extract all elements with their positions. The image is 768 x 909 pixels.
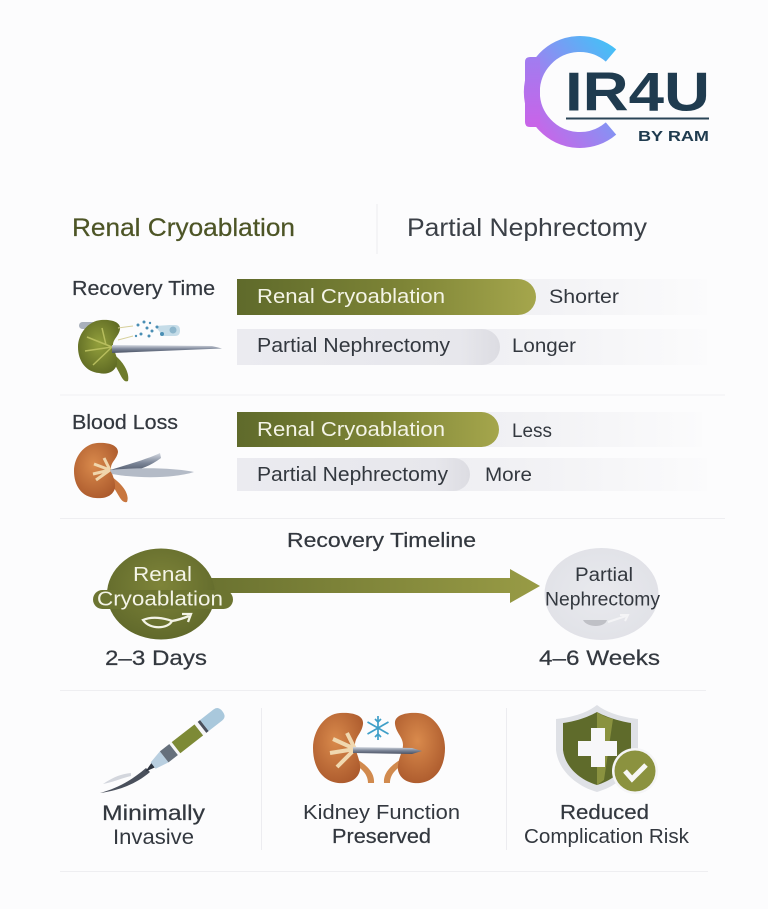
logo underline bbox=[566, 118, 709, 120]
heading: Partial Nephrectomy: Partial Nephrectomy bbox=[407, 214, 648, 242]
heading: Recovery Timeline: Recovery Timeline bbox=[287, 530, 476, 552]
logo ring bbox=[525, 44, 611, 140]
bar: Renal Cryoablation less bbox=[237, 412, 499, 447]
label: Recovery Time: Recovery Time bbox=[72, 278, 215, 300]
panel: benefits bbox=[100, 705, 690, 850]
value: 2–3 Days: 2–3 Days bbox=[105, 647, 207, 670]
icon: orange kidney with forceps bbox=[74, 443, 194, 502]
label: Complication Risk bbox=[524, 826, 690, 848]
bar: Renal Cryoablation shorter bbox=[237, 279, 536, 315]
bar track: longer bbox=[237, 329, 707, 365]
node: Renal Cryoablation bbox=[93, 548, 233, 640]
node: Renal Cryoablation: Cryoablation bbox=[97, 588, 223, 610]
bar label: Renal Cryoablation bbox=[257, 419, 445, 441]
bar: Partial Nephrectomy longer bbox=[237, 329, 500, 365]
panel: blood loss bbox=[72, 412, 707, 502]
benefit: kidney function preserved bbox=[303, 713, 460, 848]
icon: green kidney with cryoprobe bbox=[78, 320, 222, 381]
icon: kidneys with probe and snowflake bbox=[313, 713, 445, 783]
node: Partial Nephrectomy: Nephrectomy bbox=[545, 590, 660, 610]
bar track: shorter bbox=[237, 279, 707, 315]
header: comparison titles bbox=[72, 214, 648, 242]
node: Renal Cryoablation: Renal bbox=[133, 564, 192, 586]
logo byline: BY RAM bbox=[638, 129, 709, 145]
node: Partial Nephrectomy bbox=[544, 548, 660, 640]
logo wordmark: IR4U bbox=[565, 60, 710, 122]
bar label: Partial Nephrectomy bbox=[257, 335, 450, 357]
label: Invasive bbox=[113, 826, 194, 849]
label: Reduced bbox=[560, 801, 649, 824]
label: Minimally bbox=[102, 802, 206, 825]
heading: Renal Cryoablation: Renal Cryoablation bbox=[72, 214, 295, 242]
bar track: less bbox=[237, 412, 702, 447]
arrow: timeline bbox=[205, 569, 540, 603]
label: Blood Loss: Blood Loss bbox=[72, 412, 178, 434]
panel: recovery timeline bbox=[93, 530, 660, 670]
bar label: Renal Cryoablation bbox=[257, 286, 445, 308]
value: Longer: Longer bbox=[512, 336, 577, 357]
value: More: More bbox=[485, 465, 532, 486]
node: Partial Nephrectomy: Partial bbox=[575, 565, 633, 586]
panel: recovery time bbox=[72, 278, 707, 381]
benefit: reduced complication risk bbox=[524, 705, 690, 848]
bar track: more bbox=[237, 458, 707, 491]
value: 4–6 Weeks: 4–6 Weeks bbox=[539, 647, 660, 670]
bar label: Partial Nephrectomy bbox=[257, 464, 448, 486]
logo: IR4U by RAM bbox=[525, 44, 710, 145]
label: Kidney Function bbox=[303, 802, 460, 824]
benefit: minimally invasive bbox=[100, 706, 227, 849]
value: Shorter: Shorter bbox=[549, 287, 620, 308]
value: Less: Less bbox=[512, 421, 552, 442]
bar: Partial Nephrectomy more bbox=[237, 458, 470, 491]
label: Preserved bbox=[332, 825, 431, 848]
icon: cryoprobe scalpel bbox=[100, 706, 227, 793]
icon: shield with cross and check bbox=[556, 705, 658, 794]
